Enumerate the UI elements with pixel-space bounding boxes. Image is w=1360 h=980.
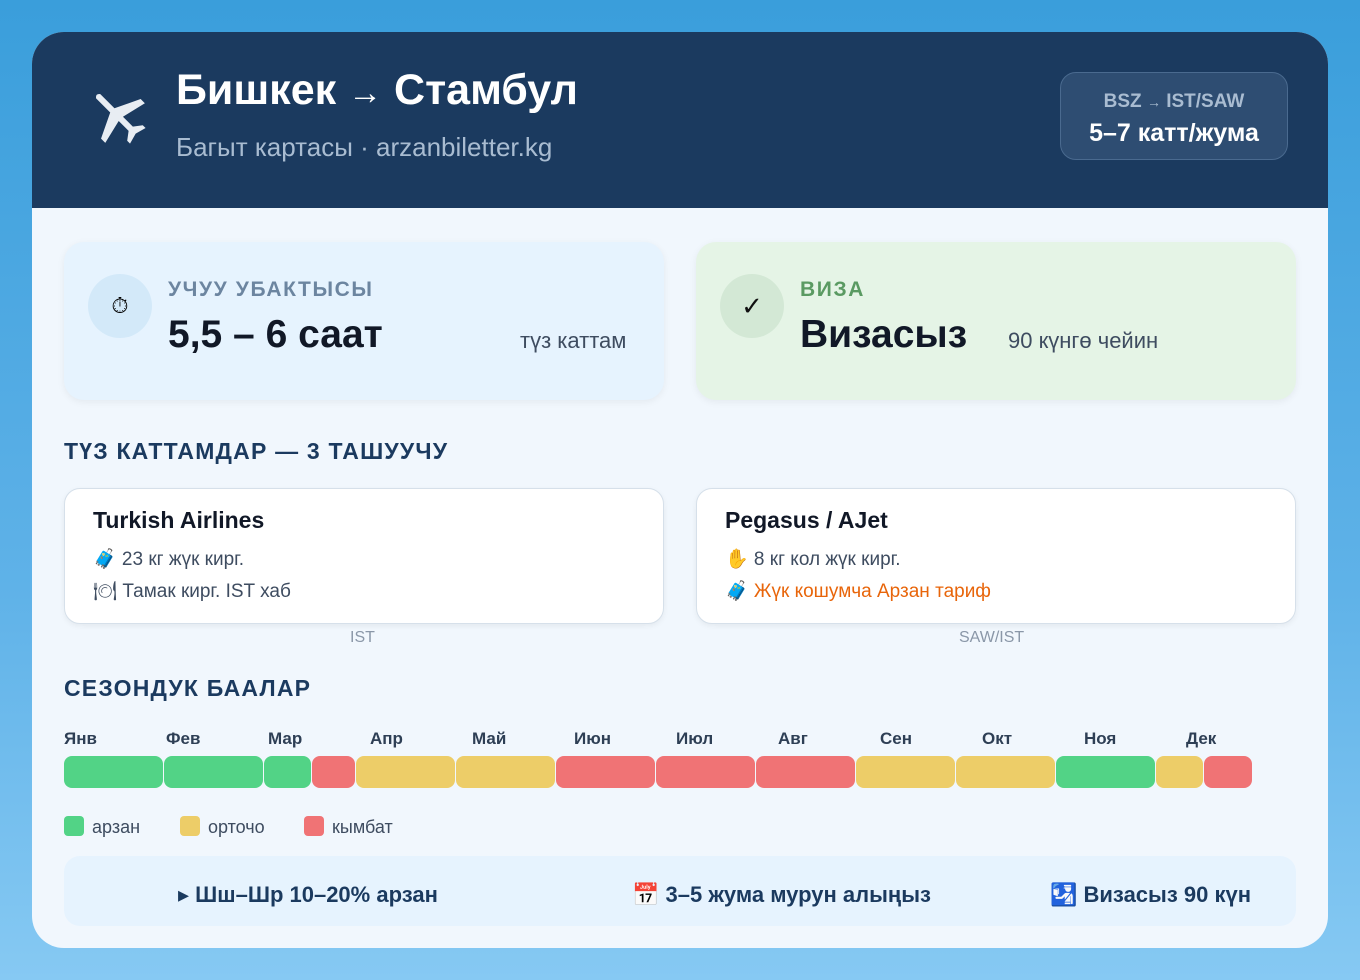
- header: [32, 32, 1328, 208]
- chart: seasonal bar: Фев: [166, 729, 200, 748]
- chart: seasonal bar: Окт: [982, 729, 1012, 748]
- panel: Turkish Airlines: [64, 488, 664, 624]
- legend: кымбат: [332, 817, 393, 837]
- chart: seasonal bar: Май: [472, 729, 506, 748]
- chart: seasonal bar: [64, 729, 1252, 788]
- tips strip: 📅 3–5 жума мурун алыңыз: [632, 882, 931, 907]
- panel: Turkish Airlines: Turkish Airlines: [93, 507, 264, 533]
- icon: plane: [96, 94, 146, 144]
- chart: seasonal bar: Дек: [1186, 729, 1216, 748]
- heading: seasonal: СЕЗОНДУК БААЛАР: [64, 675, 311, 701]
- panel: visa: [696, 242, 1296, 400]
- chart: seasonal bar: Мар: [268, 729, 302, 748]
- chart: seasonal bar: Янв: [64, 729, 97, 748]
- panel: Turkish Airlines: 🧳 23 кг жүк кирг.: [93, 549, 244, 570]
- icon: check: [720, 274, 784, 338]
- chart: seasonal bar: Ноя: [1084, 729, 1116, 748]
- chart: seasonal bar: Апр: [370, 729, 403, 748]
- legend: орточо: [208, 817, 265, 837]
- title: Бишкек → Стамбул: [176, 66, 578, 114]
- label: ВИЗА: [800, 278, 865, 301]
- subtitle: Багыт картасы · arzanbiletter.kg: [176, 132, 552, 162]
- chart: seasonal bar: Авг: [778, 729, 808, 748]
- heading: direct flights: ТҮЗ КАТТАМДАР — 3 ТАШУУЧУ: [64, 438, 448, 464]
- panel: Pegasus: Pegasus / AJet: [725, 507, 888, 533]
- label: SAW/IST: SAW/IST: [959, 629, 1024, 646]
- panel: Turkish Airlines: 🍽 Тамак кирг. IST хаб: [93, 581, 291, 602]
- icon: stopwatch: [88, 274, 152, 338]
- legend: арзан: [92, 817, 140, 837]
- chart: seasonal bar: Сен: [880, 729, 912, 748]
- badge: frequency: [1060, 72, 1288, 160]
- chart: seasonal bar: Июн: [574, 729, 611, 748]
- note: 90 күнгө чейин: [1008, 328, 1158, 353]
- badge: frequency: 5–7 катт/жума: [1089, 119, 1259, 147]
- chart: seasonal bar: Июл: [676, 729, 713, 748]
- value: Визасыз: [800, 313, 967, 356]
- badge: frequency: BSZ → IST/SAW: [1104, 91, 1244, 112]
- icon: stopwatch: ⏱: [111, 293, 129, 318]
- panel: Pegasus: 🧳 Жүк кошумча Арзан тариф: [725, 581, 991, 602]
- label: УЧУУ УБАКТЫСЫ: [168, 278, 374, 301]
- icon: check: ✓: [741, 291, 763, 321]
- tips strip: [64, 856, 1296, 926]
- tips strip: ▸ Шш–Шр 10–20% арзан: [178, 882, 438, 907]
- value: 5,5 – 6 саат: [168, 313, 383, 356]
- tips strip: 🛂 Визасыз 90 күн: [1050, 882, 1251, 907]
- legend: [64, 816, 393, 837]
- note: түз каттам: [520, 328, 626, 353]
- panel: flight time: [64, 242, 664, 400]
- panel: Pegasus: ✋ 8 кг кол жүк кирг.: [725, 549, 901, 570]
- label: IST: IST: [350, 629, 375, 646]
- panel: Pegasus: [696, 488, 1296, 624]
